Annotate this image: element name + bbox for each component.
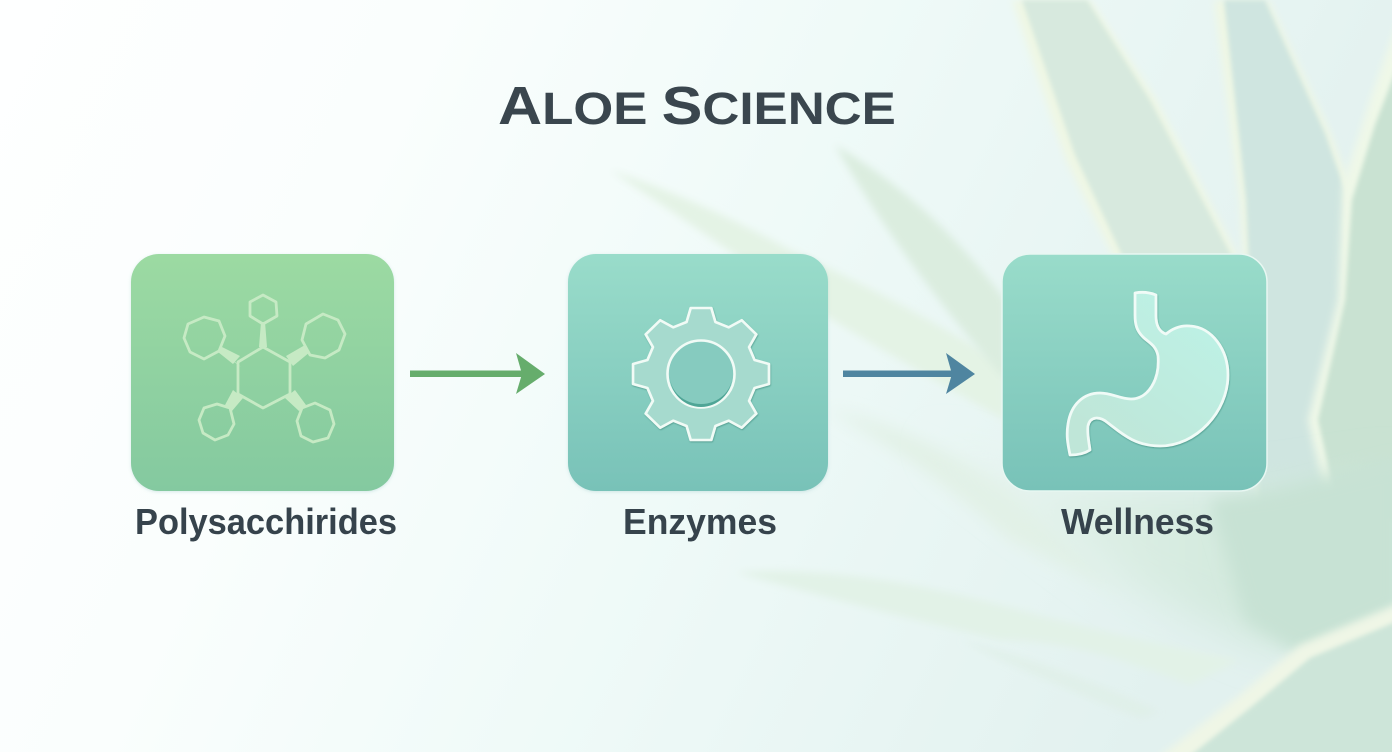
label: Wellness: Wellness: [1061, 501, 1214, 542]
card: polysaccharides: [131, 254, 394, 491]
background: blurred aloe leaves: [610, 0, 1392, 752]
card: wellness: [1002, 254, 1267, 491]
panel: wellness: [1002, 254, 1267, 542]
arrow: blue: [843, 353, 975, 394]
icon: stomach: [1067, 292, 1228, 455]
panel: polysaccharides: [131, 254, 397, 542]
label: Polysaccharides: Polysacchirides: [135, 501, 397, 542]
label: Enzymes: Enzymes: [623, 501, 777, 542]
title: ALOE SCIENCE: [498, 76, 896, 136]
icon: gear: [633, 308, 769, 440]
icon: molecule: [184, 295, 345, 442]
arrow: green: [410, 353, 545, 394]
card: enzymes: [568, 254, 828, 491]
panel: enzymes: [568, 254, 828, 542]
